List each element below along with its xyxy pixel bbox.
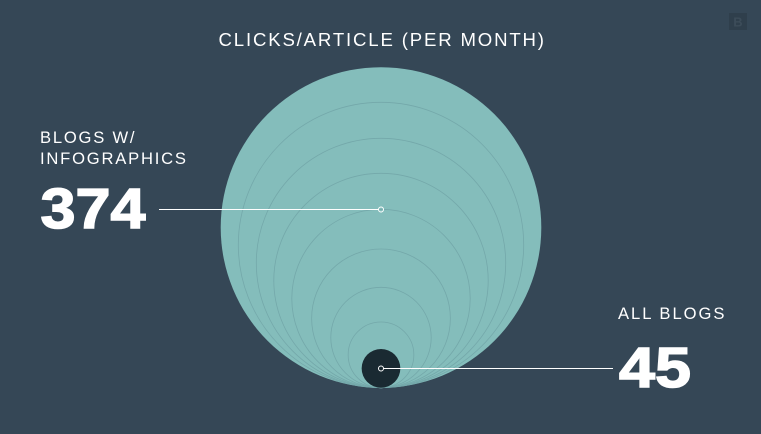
value: 374: 374 [40,177,146,240]
value: 45: 45 [619,336,691,399]
title: CLICKS/ARTICLE (PER MONTH) [218,29,544,50]
nested comparison rings [238,102,524,388]
leader line: 374 [159,207,384,212]
outer circle: blogs with infographics [221,67,541,388]
chart: nested circles [221,67,541,388]
inner circle: all blogs [362,349,400,388]
label: all blogs: ALL BLOGS [618,304,724,323]
label: blogs with infographics [40,128,186,168]
leader line: 45 [378,366,613,371]
icon: logo badge [729,13,747,30]
label: blogs with infographics: INFOGRAPHICS [40,149,186,168]
label: blogs with infographics: BLOGS W/ [40,128,135,147]
icon: logo badge: B [733,14,743,30]
